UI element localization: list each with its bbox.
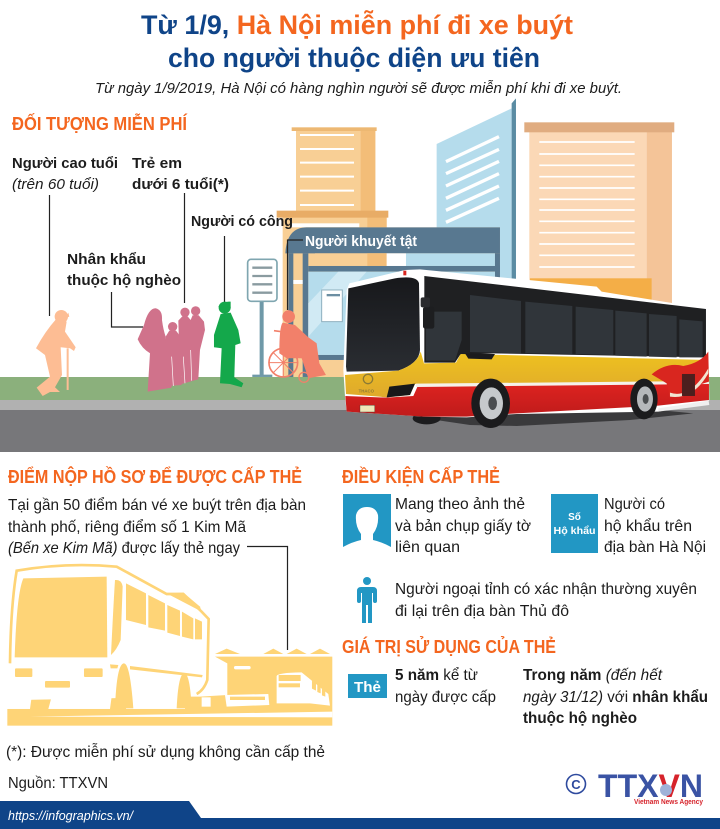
leader line to station xyxy=(247,546,288,650)
icon: household book xyxy=(551,494,598,553)
building: right tower xyxy=(524,122,674,377)
label: nhân khẩu thuộc hộ nghèo xyxy=(67,251,181,289)
bus side windows xyxy=(424,276,706,363)
logo: TTXVN: TTXVN xyxy=(598,768,703,804)
logo: TTXVN: Vietnam News Agency xyxy=(634,799,703,806)
label: trẻ em: Trẻ em xyxy=(132,155,182,172)
label: trẻ em: dưới 6 tuổi(*) xyxy=(132,176,229,193)
text: hộ khẩu xyxy=(604,496,706,556)
heading: điểm nộp hồ sơ: ĐIỂM NỘP HỒ SƠ ĐỂ ĐƯỢC CẤP THẺ xyxy=(8,466,302,487)
icon: portrait photo xyxy=(343,494,391,553)
text: trong năm: ngày 31/12) với nhân khẩu xyxy=(523,688,708,706)
building: blue tower xyxy=(437,98,516,377)
label: người khuyết tật: Người khuyết tật xyxy=(305,233,417,250)
illustration: red and yellow city bus: THACO xyxy=(359,389,375,394)
white stripe xyxy=(416,381,709,387)
text: hộ khẩu: hộ khẩu trên xyxy=(604,517,692,535)
bus body xyxy=(343,269,709,417)
text: trong năm: thuộc hộ nghèo xyxy=(523,710,637,727)
icon: standing person xyxy=(357,577,377,623)
bus outline xyxy=(10,565,209,694)
illustration: red and yellow city bus xyxy=(343,269,709,428)
footer bar xyxy=(0,801,720,829)
icon: card badge: Thẻ xyxy=(354,679,381,696)
station xyxy=(200,657,332,709)
icon: family group xyxy=(138,306,205,392)
source: Nguồn: TTXVN xyxy=(8,775,108,792)
label: nhân khẩu thuộc hộ nghèo: Nhân khẩu xyxy=(67,251,146,268)
wheels and supports xyxy=(30,697,202,709)
skirt xyxy=(658,401,709,412)
icon: bus stop sign xyxy=(248,259,277,377)
street scene background xyxy=(0,98,720,452)
text: trong năm: Trong năm (đến hết xyxy=(523,667,663,684)
text: trong năm xyxy=(523,667,708,727)
icon: household book: Số xyxy=(568,511,581,523)
small bus in station xyxy=(277,672,330,706)
rear wheel xyxy=(630,379,658,419)
front wheel xyxy=(471,379,510,428)
text: hộ khẩu: địa bàn Hà Nội xyxy=(604,539,706,556)
illustration: yellow bus and station xyxy=(7,565,332,726)
text: ảnh thẻ xyxy=(395,496,531,556)
red lower body xyxy=(345,384,709,417)
text: 5 năm xyxy=(395,666,496,706)
footer bar: https://infographics.vn/ xyxy=(8,808,134,823)
icon: veteran xyxy=(214,302,243,387)
title xyxy=(141,9,573,73)
ground xyxy=(7,709,332,726)
ground: road xyxy=(0,410,720,452)
mirror xyxy=(423,307,434,329)
text: ảnh thẻ: liên quan xyxy=(395,539,460,556)
text: điểm nộp description: (Bến xe Kim Mã) được lấy thẻ ngay xyxy=(8,540,240,557)
label: nhân khẩu thuộc hộ nghèo: thuộc hộ nghèo xyxy=(67,272,181,289)
text: 5 năm: ngày được cấp xyxy=(395,689,496,706)
front logo xyxy=(363,374,373,384)
label: trẻ em xyxy=(132,155,229,193)
title: Từ 1/9, Hà Nội miễn phí đi xe buýt xyxy=(141,9,573,40)
footnote: (*): Được miễn phí sử dụng không cần cấp thẻ xyxy=(6,742,325,761)
large bus xyxy=(10,565,209,700)
icon: card badge xyxy=(348,674,387,698)
building: left tower xyxy=(277,127,388,377)
label: người cao tuổi: Người cao tuổi xyxy=(12,155,118,172)
tail flame graphic xyxy=(652,352,709,397)
heading: điều kiện cấp thẻ: ĐIỀU KIỆN CẤP THẺ xyxy=(342,466,500,487)
text: 5 năm: 5 năm kể từ xyxy=(395,666,478,684)
small side bus xyxy=(225,694,269,707)
ground: pavement xyxy=(0,400,720,410)
bus shelter xyxy=(285,227,500,377)
bus shadow xyxy=(413,410,693,426)
ground: grass xyxy=(0,377,720,400)
text: người ngoại tỉnh xyxy=(395,581,697,620)
text: điểm nộp description: thành phố, riêng điểm số 1 Kim Mã xyxy=(8,518,246,536)
text: điểm nộp description xyxy=(8,496,306,557)
label: người cao tuổi xyxy=(12,155,118,193)
leader lines xyxy=(50,193,303,327)
text: hộ khẩu: Người có xyxy=(604,496,665,513)
icon: wheelchair user xyxy=(269,310,326,382)
label: người cao tuổi: (trên 60 tuổi) xyxy=(12,176,99,193)
text: ảnh thẻ: và bản chụp giấy tờ xyxy=(395,518,531,535)
heading: đối tượng miễn phí: ĐỐI TƯỢNG MIỄN PHÍ xyxy=(12,113,188,134)
label: người có công: Người có công xyxy=(191,213,293,230)
icon: household book: Hộ khẩu xyxy=(554,525,596,537)
text: người ngoại tỉnh: đi lại trên địa bàn Thủ đô xyxy=(395,603,569,620)
text: điểm nộp description: Tại gần 50 điểm bán vé xe buýt trên địa bàn xyxy=(8,496,306,514)
roof marker xyxy=(403,271,406,275)
headlamp xyxy=(387,384,415,397)
subtitle: Từ ngày 1/9/2019, Hà Nội có hàng nghìn người sẽ được miễn phí khi đi xe buýt. xyxy=(95,80,622,97)
title: cho người thuộc diện ưu tiên xyxy=(168,43,540,73)
icon: elderly person xyxy=(36,310,76,396)
text: ảnh thẻ: Mang theo ảnh thẻ xyxy=(395,496,525,513)
side logo xyxy=(465,353,495,359)
text: người ngoại tỉnh: Người ngoại tỉnh có xác nhận thường xuyên xyxy=(395,581,697,598)
yellow band xyxy=(345,352,709,397)
heading: giá trị sử dụng: GIÁ TRỊ SỬ DỤNG CỦA THẺ xyxy=(342,636,556,657)
windshield xyxy=(346,277,420,372)
logo: TTXVN: C xyxy=(571,777,581,792)
